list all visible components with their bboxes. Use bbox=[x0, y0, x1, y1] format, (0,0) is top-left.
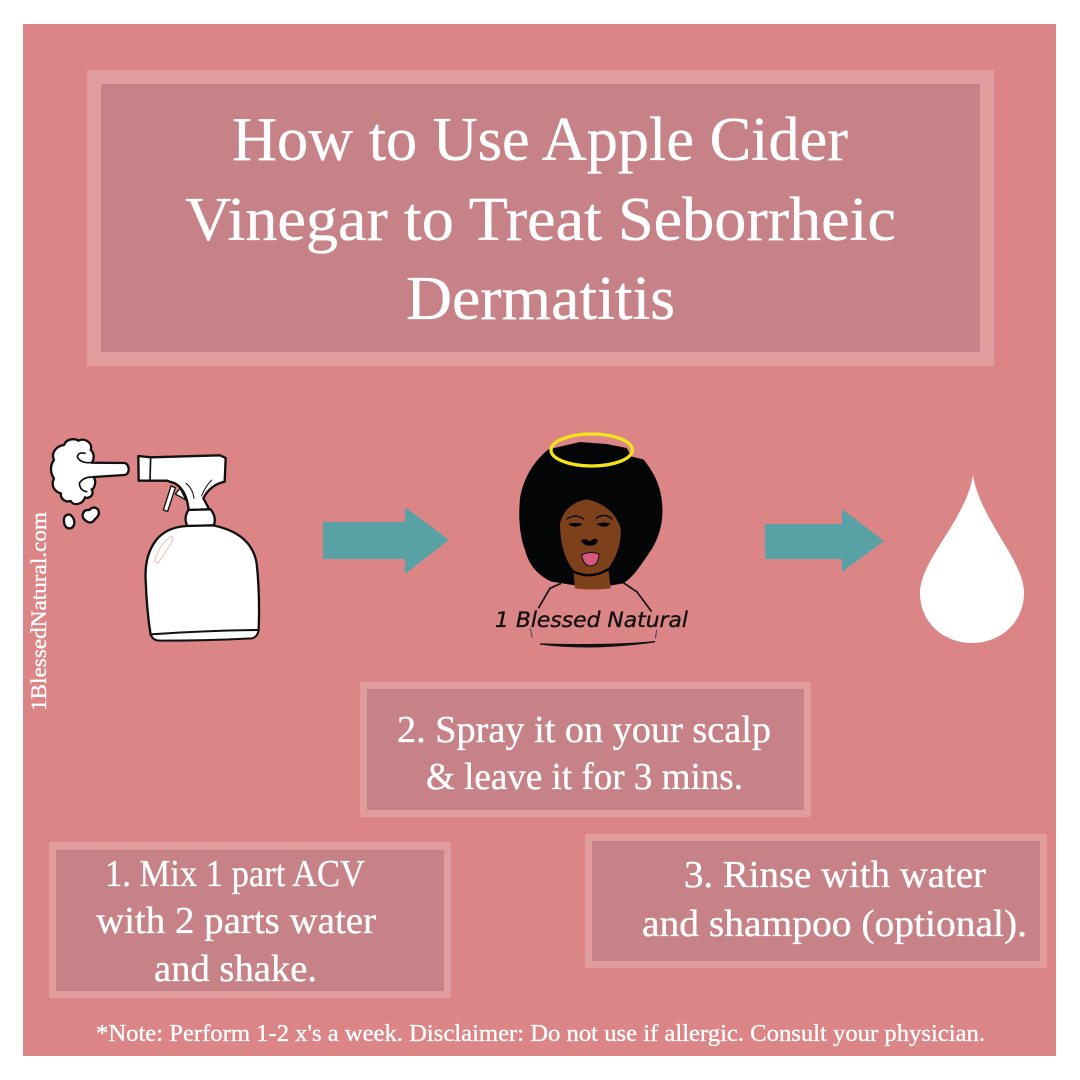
neck and face bbox=[560, 499, 621, 589]
bottle highlight bbox=[155, 536, 173, 563]
nose bbox=[582, 539, 597, 545]
mouth bbox=[582, 553, 599, 566]
spray cloud bbox=[51, 439, 129, 504]
step 1 text: with 2 parts water bbox=[96, 900, 376, 942]
hair bbox=[519, 442, 662, 588]
footnote: *Note: Perform 1-2 x's a week. Disclaimer: Do not use if allergic. Consult your physician. bbox=[96, 1021, 985, 1047]
spray droplets bbox=[83, 507, 99, 523]
title text: Vinegar to Treat Seborrheic bbox=[185, 186, 896, 254]
step 3 box bbox=[585, 834, 1047, 968]
step 2 box bbox=[360, 682, 811, 817]
step 3 text bbox=[642, 854, 1027, 945]
title text: How to Use Apple Cider bbox=[232, 106, 848, 174]
step 3 text: 3. Rinse with water bbox=[684, 854, 986, 896]
logo text: 1 Blessed Natural bbox=[495, 608, 688, 632]
bottle base bbox=[151, 630, 259, 641]
step 1 box bbox=[49, 842, 451, 998]
step 2 text: & leave it for 3 mins. bbox=[426, 756, 743, 798]
step 2 text: 2. Spray it on your scalp bbox=[397, 709, 771, 751]
step 1 text bbox=[96, 853, 376, 990]
shoulders bbox=[538, 583, 652, 612]
title text bbox=[185, 106, 896, 333]
jaw line bbox=[572, 568, 610, 575]
icon: water drop bbox=[920, 475, 1024, 643]
arrow: second bbox=[765, 509, 884, 572]
icon: natural hair logo bbox=[519, 434, 662, 647]
icon: spray bottle bbox=[51, 439, 259, 641]
spray trigger bbox=[163, 486, 175, 511]
halo bbox=[551, 434, 632, 466]
step 3 text: and shampoo (optional). bbox=[642, 903, 1027, 945]
bottle neck bbox=[186, 509, 215, 526]
title box bbox=[87, 70, 994, 366]
step 2 text bbox=[397, 709, 771, 798]
spray head bbox=[138, 455, 226, 510]
bottle body bbox=[146, 525, 259, 635]
step 1 text: 1. Mix 1 part ACV bbox=[105, 853, 366, 895]
step 1 text: and shake. bbox=[154, 948, 317, 990]
arrow: first bbox=[323, 507, 449, 574]
title text: Dermatitis bbox=[406, 265, 675, 333]
eyebrows and eyes bbox=[567, 515, 613, 519]
vertical website credit: 1BlessedNatural.com bbox=[26, 512, 51, 711]
